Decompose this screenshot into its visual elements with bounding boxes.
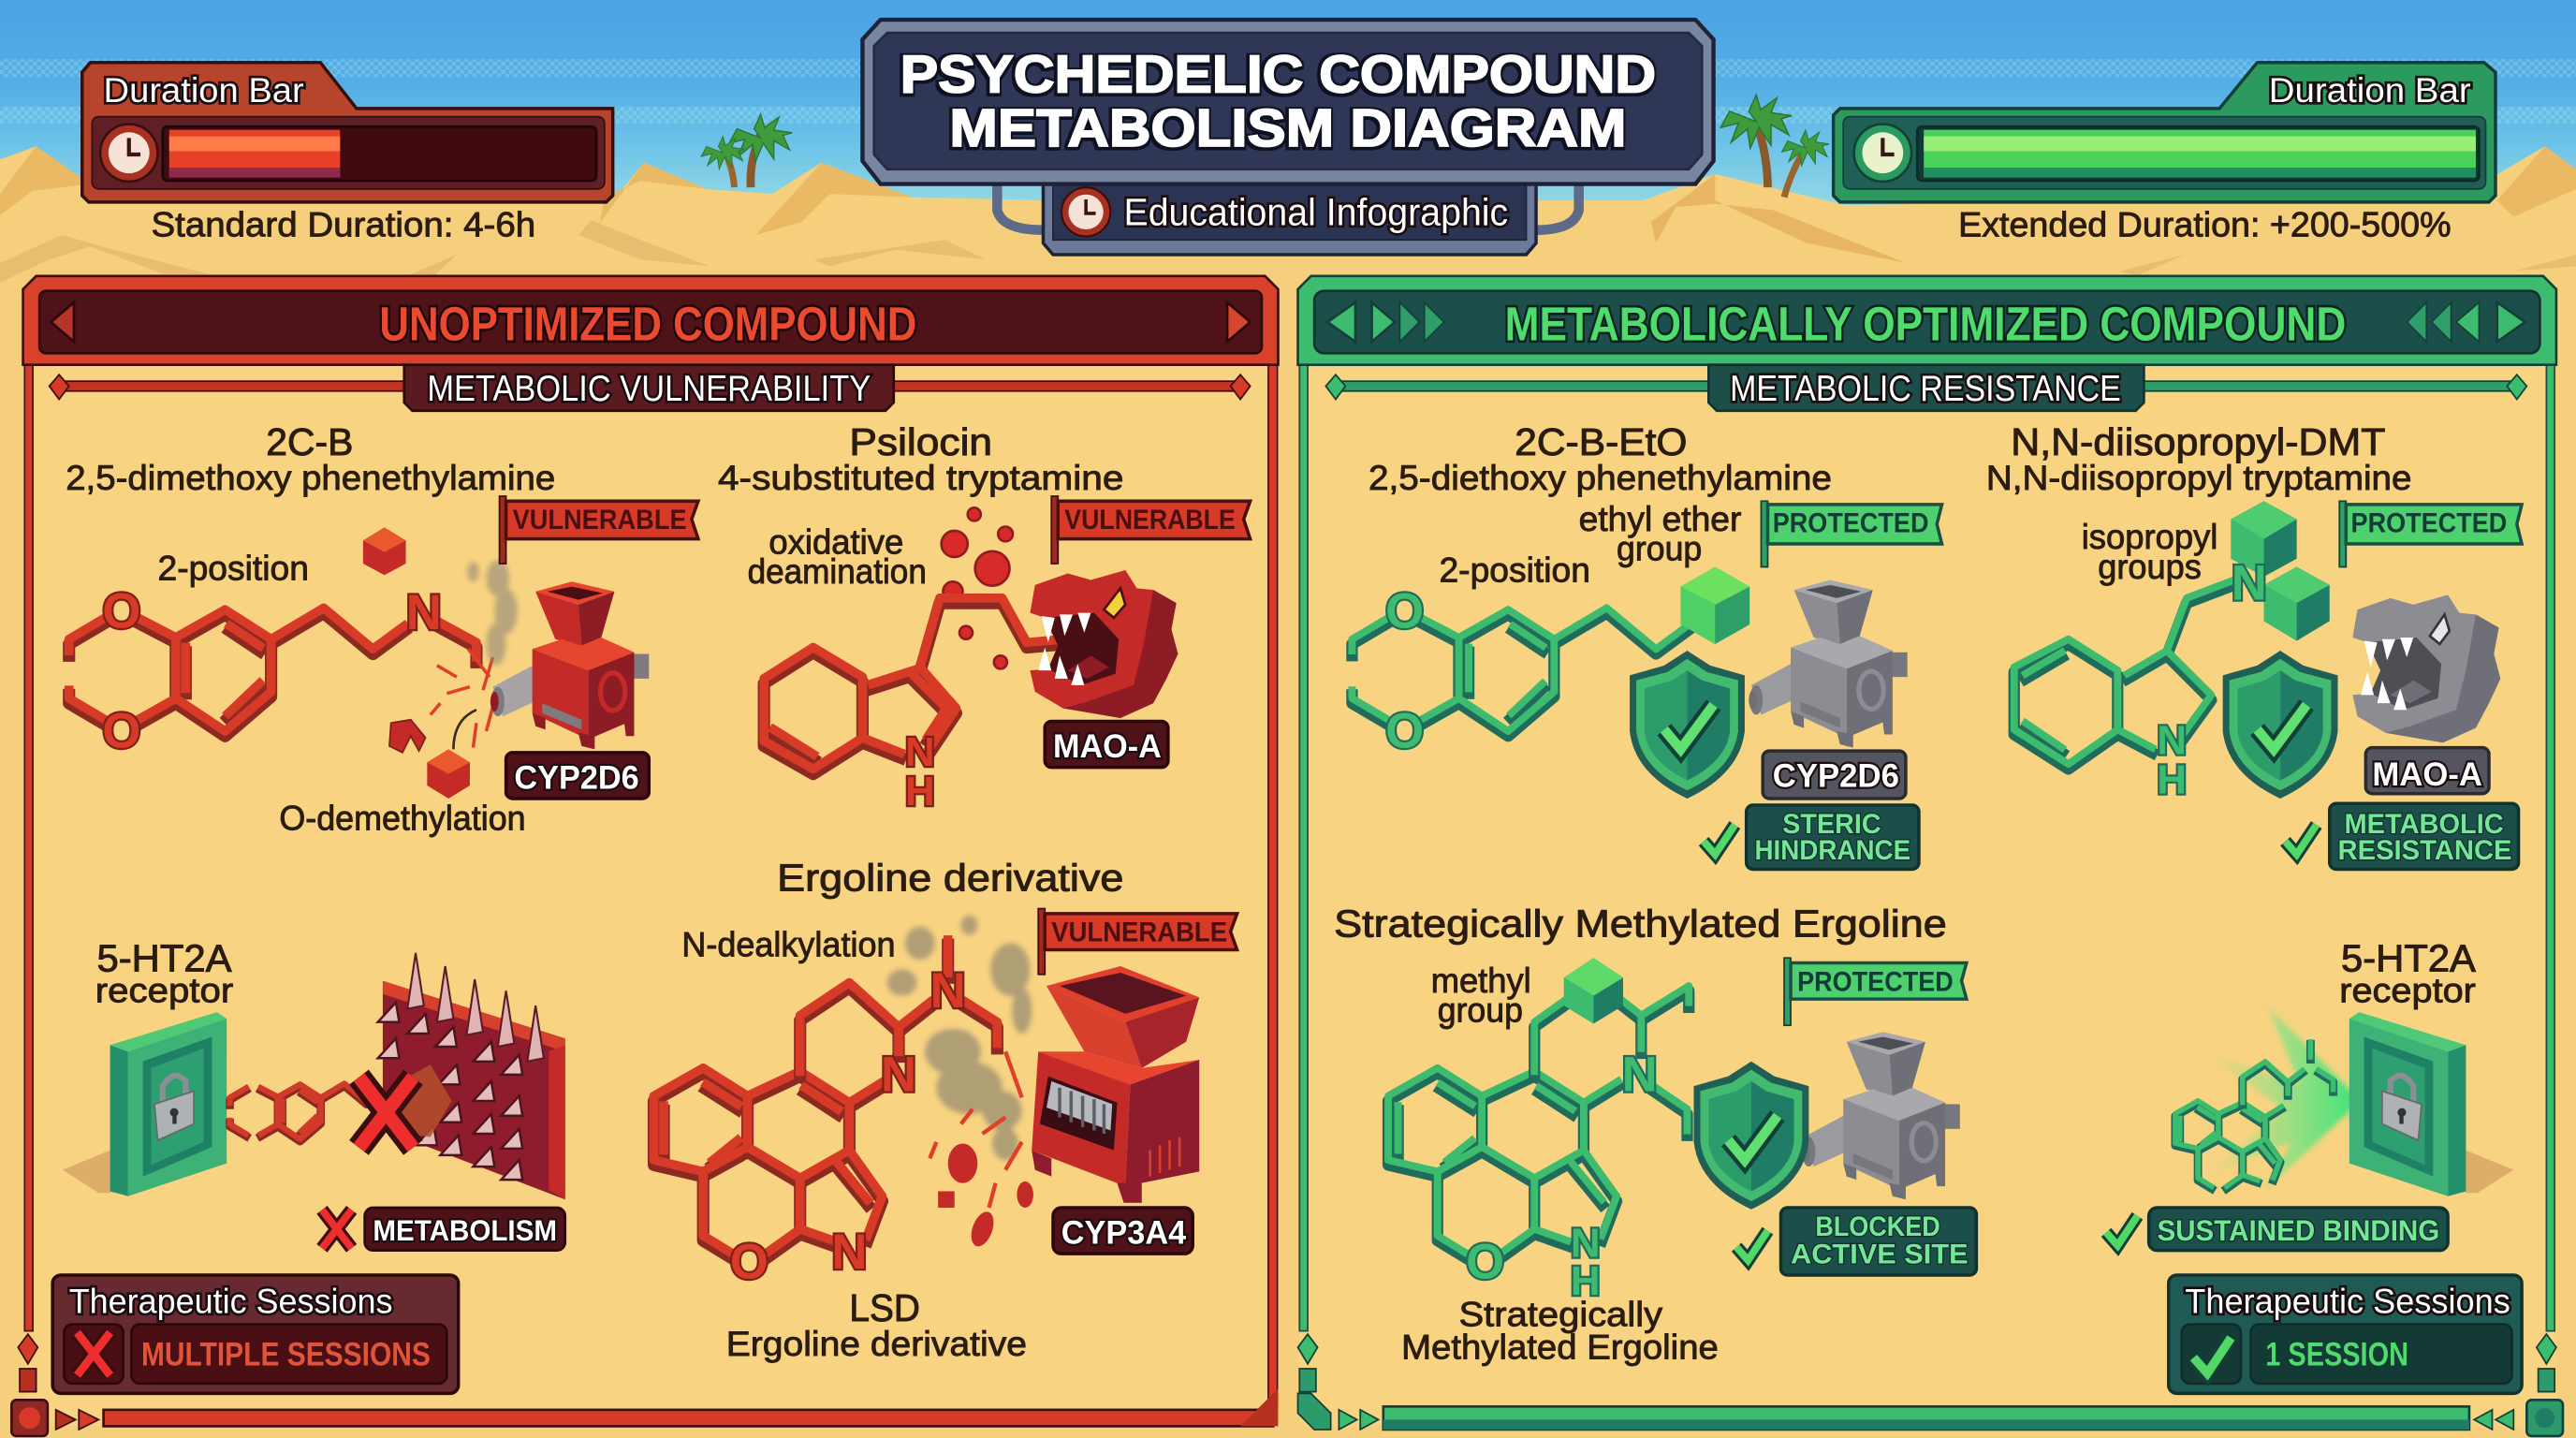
sessions value: MULTIPLE SESSIONS (141, 1336, 431, 1372)
name below: Ergoline derivative (726, 1325, 1027, 1363)
enzyme label: MAO-A (1053, 728, 1162, 765)
duration label: Duration Bar (104, 71, 304, 110)
compound: N,N-diisopropyl-DMT (1986, 420, 2522, 869)
sustained binding label: SUSTAINED BINDING (2157, 1213, 2439, 1247)
class: N,N-diisopropyl tryptamine (1986, 459, 2411, 497)
green glow (2202, 1005, 2361, 1191)
monster eye (2430, 614, 2450, 644)
molecule: methylated ergoline: O (1466, 1234, 1504, 1289)
panel: metabolically optimized compound (1298, 276, 2563, 1436)
molecule: methylated ergoline: N (1571, 1221, 1601, 1267)
annotation: O-demethylation: O-demethylation (279, 799, 526, 837)
name below: Methylated Ergoline (1401, 1328, 1719, 1366)
name above: Strategically Methylated Ergoline (1334, 902, 1947, 945)
badge: steric hindrance: HINDRANCE (1754, 835, 1910, 866)
extended duration caption: Extended Duration: +200-500% (1958, 206, 2452, 244)
spike wall (378, 953, 565, 1199)
title text: METABOLISM DIAGRAM (949, 98, 1627, 157)
badge: blocked active site (1736, 1208, 1976, 1275)
molecule: 2C-B: N (406, 585, 442, 640)
flag: vulnerable: VULNERABLE (1064, 505, 1236, 536)
panel: unoptimized compound (11, 276, 1278, 1436)
compound: LSD (654, 856, 1237, 1363)
subtitle plaque (997, 178, 1579, 255)
molecule: methylated ergoline: N (1622, 1047, 1658, 1102)
sessions heading: Therapeutic Sessions (2185, 1282, 2510, 1320)
annotation: methyl group: group (1438, 991, 1523, 1030)
duration bar: extended (1834, 63, 2496, 202)
compound: strategically methylated ergoline (1334, 902, 1976, 1366)
compound: 2C-B-EtO (1352, 420, 1942, 869)
annotation: oxidative deamination: deamination (748, 552, 927, 591)
flag: protected: PROTECTED (1797, 966, 1954, 997)
annotation: isopropyl groups: isopropyl (2082, 518, 2217, 556)
panel header (1298, 276, 2556, 365)
molecule: methylated ergoline (1388, 958, 1689, 1304)
metabolism label (322, 1208, 565, 1251)
molecule: psilocin: N (905, 729, 935, 775)
annotations: 2-position (1439, 550, 1590, 589)
badge: metabolic resistance: METABOLIC (2345, 809, 2504, 840)
panel frame (11, 365, 1278, 1436)
red cross (359, 1078, 413, 1148)
sessions heading: Therapeutic Sessions (69, 1282, 392, 1320)
cross box (64, 1325, 124, 1384)
fragments and sparks (929, 1051, 1033, 1250)
sessions value: 1 SESSION (2265, 1336, 2408, 1372)
annotation: isopropyl groups (2082, 518, 2217, 586)
enzyme: grey grinder (1801, 1032, 1960, 1199)
panel header (23, 276, 1278, 365)
fragments and sparks (363, 527, 493, 799)
annotation: methyl group: methyl (1431, 961, 1531, 1000)
shield (1694, 1062, 1808, 1210)
ethyl cube (1680, 567, 1749, 644)
background sky (0, 0, 2576, 205)
isopropyl cubes: N (2232, 556, 2267, 611)
panel heading: METABOLICALLY OPTIMIZED COMPOUND (1505, 297, 2346, 350)
molecule: LSD: N (930, 963, 966, 1019)
duration label: Duration Bar (2269, 71, 2471, 110)
molecule: 2C-B-EtO: O (1385, 704, 1424, 759)
flag: vulnerable: VULNERABLE (513, 505, 687, 536)
name: 2C-B-EtO (1515, 420, 1687, 463)
sustained binding label (2106, 1208, 2448, 1251)
panel background (1299, 355, 2556, 1426)
duration bar: standard (82, 63, 613, 202)
molecule: tryptamine: H (2157, 757, 2187, 803)
class: 2,5-diethoxy phenethylamine (1368, 459, 1832, 497)
panel background (24, 355, 1278, 1426)
molecule: 2C-B: O (102, 704, 140, 759)
section banner: metabolic resistance: METABOLIC RESISTANCE (1730, 369, 2121, 409)
enzyme label (1763, 751, 1906, 799)
annotation: oxidative deamination (748, 522, 927, 591)
receptor block: blocked binding (63, 936, 565, 1251)
molecule: 2C-B-EtO (1352, 583, 1687, 759)
flag: vulnerable: VULNERABLE (1051, 917, 1227, 948)
flag: protected: PROTECTED (1773, 508, 1928, 539)
flag: protected (1761, 501, 1942, 567)
name below: LSD (849, 1286, 920, 1329)
enzyme label: CYP3A4 (1061, 1215, 1187, 1252)
molecule: LSD: N (831, 1225, 867, 1280)
sessions value (2250, 1325, 2512, 1384)
annotation: oxidative deamination: oxidative (768, 522, 903, 561)
compound: psilocin (718, 420, 1251, 814)
flag: vulnerable (500, 496, 698, 564)
therapeutic sessions: multiple (52, 1275, 459, 1393)
enzyme label: CYP2D6 (514, 759, 639, 796)
receptor door (2349, 1012, 2513, 1196)
molecule: tryptamine (2014, 580, 2234, 803)
compound: 2C-B (66, 420, 698, 837)
flag: vulnerable (1051, 496, 1251, 564)
name: N,N-diisopropyl-DMT (2011, 420, 2385, 463)
bound mini molecule (2175, 1042, 2334, 1189)
shield (1630, 651, 1745, 799)
shield (2223, 651, 2338, 799)
receptor label: receptor (95, 972, 233, 1010)
annotation: methyl group (1431, 961, 1531, 1030)
badge: blocked active site: ACTIVE SITE (1791, 1240, 1969, 1270)
flag: protected: PROTECTED (2351, 508, 2507, 539)
annotations: ethyl ether (1579, 500, 1741, 538)
enzyme: grinder (490, 581, 649, 749)
name below: Strategically (1459, 1295, 1663, 1333)
molecule: 2C-B: O (102, 583, 140, 638)
badge: metabolic resistance (2285, 803, 2519, 869)
right palm trees (1720, 95, 1829, 198)
enzyme label: MAO-A (2372, 756, 2482, 793)
name: Psilocin (849, 420, 992, 463)
smoke (467, 560, 518, 666)
title plaque (862, 20, 1714, 184)
standard duration caption: Standard Duration: 4-6h (151, 206, 535, 244)
enzyme label: CYP2D6 (1773, 758, 1899, 795)
title text: PSYCHEDELIC COMPOUND (900, 44, 1656, 103)
smoke (887, 916, 1032, 1160)
molecule: LSD: N (881, 1047, 916, 1102)
name above: Ergoline derivative (777, 856, 1123, 899)
name below (1401, 1295, 1719, 1366)
check box (2182, 1325, 2241, 1384)
annotation: 2-position: 2-position (157, 550, 309, 588)
annotations: group (1617, 529, 1702, 567)
monster eye (1104, 588, 1125, 618)
molecule: LSD: O (730, 1234, 768, 1289)
receptor label: receptor (2339, 972, 2476, 1010)
enzyme: grey monster (2352, 594, 2500, 742)
receptor label (95, 936, 233, 1010)
panel frame (1298, 365, 2563, 1436)
section banner: metabolic vulnerability: METABOLIC VULNERABILITY (427, 369, 871, 409)
receptor: sustained binding (2106, 936, 2513, 1251)
badge: blocked active site: BLOCKED (1815, 1211, 1940, 1242)
panel heading: UNOPTIMIZED COMPOUND (379, 297, 916, 350)
metabolism label: METABOLISM (373, 1213, 557, 1247)
molecule: psilocin (764, 598, 1064, 814)
impact (394, 1064, 452, 1137)
receptor label: 5-HT2A (97, 936, 232, 979)
section banner: metabolic vulnerability (50, 365, 1251, 411)
subtitle text: Educational Infographic (1123, 190, 1508, 233)
flag: vulnerable (1038, 909, 1237, 975)
receptor label (2339, 936, 2476, 1010)
annotation: N-dealkylation: N-dealkylation (681, 925, 896, 963)
sessions value (131, 1325, 446, 1384)
receptor door (63, 1012, 227, 1196)
name below (726, 1286, 1027, 1363)
molecule: tryptamine: N (2157, 718, 2187, 764)
molecule: 2C-B-EtO: O (1385, 583, 1424, 638)
enzyme: monster head (1030, 570, 1178, 718)
title text (900, 44, 1656, 157)
left palm trees (701, 114, 792, 187)
annotation: isopropyl groups: groups (2098, 548, 2202, 586)
flag: protected (2339, 501, 2522, 567)
enzyme: shredder (1032, 966, 1199, 1203)
badge: steric hindrance: STERIC (1782, 809, 1881, 840)
badge: steric hindrance (1704, 805, 1919, 869)
badge: metabolic resistance: RESISTANCE (2338, 835, 2512, 866)
molecule: 2C-B (69, 583, 476, 759)
class: 4-substituted tryptamine (718, 459, 1123, 497)
receptor label: 5-HT2A (2341, 936, 2476, 979)
therapeutic sessions: one (2169, 1275, 2522, 1393)
annotations (1439, 500, 1741, 589)
class: 2,5-dimethoxy phenethylamine (66, 459, 555, 497)
molecule: psilocin: H (905, 769, 935, 814)
flag: protected (1784, 958, 1967, 1025)
molecule: LSD (654, 940, 997, 1289)
section banner: metabolic resistance (1325, 365, 2526, 411)
isopropyl cubes (2231, 501, 2330, 640)
name: 2C-B (266, 420, 353, 463)
mini molecule (230, 1083, 381, 1141)
enzyme: grey grinder (1749, 580, 1908, 748)
droplets (942, 507, 1013, 668)
molecule: methylated ergoline: H (1571, 1258, 1601, 1304)
